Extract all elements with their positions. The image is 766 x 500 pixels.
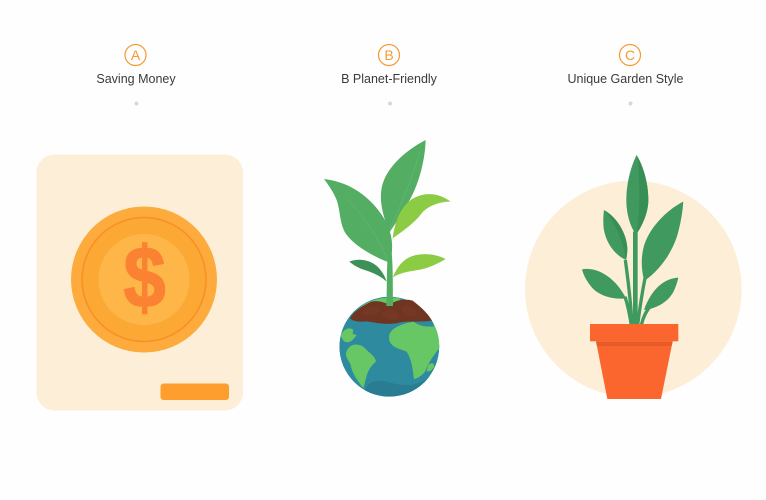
plant stems: [625, 232, 652, 325]
label: Saving Money: Saving Money: [96, 72, 176, 86]
dot marker B: [388, 102, 392, 106]
top leaf: [381, 140, 426, 233]
dot marker C: [628, 102, 632, 106]
icon: globe: [339, 297, 442, 400]
leaf veins: [347, 152, 420, 260]
pot rim: [590, 324, 678, 341]
panel: saving money card: [36, 154, 243, 410]
lower right leaf: [393, 254, 446, 277]
column header: Planet-Friendly: [341, 44, 438, 106]
dollar sign: $: [123, 231, 166, 326]
badge C: C: [625, 47, 635, 63]
pot shadow band: [596, 341, 673, 346]
label: Unique Garden Style: Unique Garden Style: [567, 72, 684, 86]
leaf shading: [605, 156, 648, 260]
big left leaf: [324, 179, 392, 263]
lower left leaf: [582, 269, 626, 299]
upper right leaf: [642, 202, 683, 281]
card background: [36, 154, 243, 410]
column header: Saving Money: [96, 44, 176, 106]
upper left leaf: [603, 210, 627, 260]
panel: plant on globe: [324, 140, 451, 400]
top leaf: [626, 155, 648, 234]
cream circle: [525, 181, 742, 397]
plant stem: [386, 237, 393, 306]
lower right leaf: [644, 278, 678, 310]
light right leaf: [393, 194, 451, 238]
column header: Unique Garden Style: [567, 44, 684, 106]
icon: dollar coin: [71, 206, 217, 352]
badge A: A: [131, 47, 141, 63]
infographic canvas: [36, 44, 742, 410]
soil mound: [350, 300, 432, 324]
label: B Planet-Friendly: B Planet-Friendly: [341, 72, 438, 86]
panel: potted plant: [525, 155, 742, 399]
pot body: [596, 341, 673, 399]
badge B: B: [384, 47, 394, 63]
orange bar: [160, 384, 229, 400]
dot marker A: [134, 102, 138, 106]
lower left dark leaf: [349, 260, 387, 282]
